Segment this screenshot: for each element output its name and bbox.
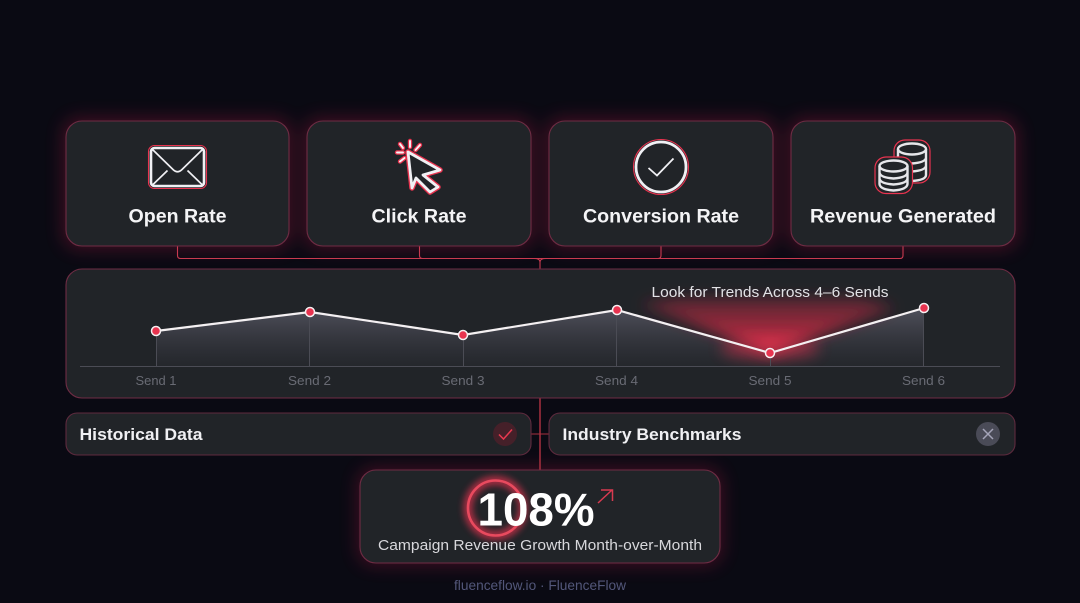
chart: send labels	[136, 373, 945, 388]
result caption: Campaign Revenue Growth Month-over-Month	[378, 537, 702, 554]
icon: envelope	[148, 146, 206, 188]
chart: send labels: Send 6	[902, 373, 945, 388]
footer: fluenceflow.io · FluenceFlow	[454, 578, 626, 593]
chart: send labels: Send 2	[288, 373, 331, 388]
stat: 108%: 108%	[478, 484, 594, 536]
panel: conversion rate	[549, 121, 773, 246]
panel: revenue growth result	[360, 470, 720, 563]
label: industry benchmarks: Industry Benchmarks	[562, 425, 742, 444]
label: conversion rate: Conversion Rate	[583, 206, 739, 228]
chart: drop lines	[80, 308, 1000, 366]
icon: grey cross badge	[976, 422, 1000, 446]
background glows behind panels	[63, 118, 1018, 565]
icon: glowing ring	[468, 480, 523, 536]
panel: historical data	[66, 413, 531, 455]
infographic canvas	[54, 109, 1027, 590]
panel: open rate	[66, 121, 289, 246]
connector lines	[178, 246, 903, 470]
icon: up-right arrow	[598, 490, 612, 503]
panel: click rate	[307, 121, 531, 246]
label: historical data: Historical Data	[80, 425, 203, 444]
panel: revenue generated	[791, 121, 1015, 246]
icon: coin stacks	[875, 140, 930, 194]
chart: send labels: Send 1	[136, 373, 176, 388]
chart: send labels: Send 5	[748, 373, 792, 388]
chart: send labels: Send 3	[442, 373, 484, 388]
icon: check circle	[634, 140, 688, 194]
chart: area under line	[156, 308, 924, 366]
label: revenue generated: Revenue Generated	[810, 206, 996, 228]
chart: data points	[152, 304, 928, 358]
chart: send labels: Send 4	[595, 373, 638, 388]
label: open rate: Open Rate	[128, 206, 227, 228]
label: click rate: Click Rate	[372, 206, 467, 228]
chart: red glow on sends 4 to 6	[640, 298, 895, 360]
chart: trend line	[156, 308, 924, 353]
icon: cursor click	[397, 141, 440, 192]
icon: red check badge	[493, 422, 517, 446]
panel: industry benchmarks	[549, 413, 1015, 455]
chart annotation: Look for Trends Across 4–6 Sends	[652, 285, 888, 301]
panel: trend chart	[66, 269, 1015, 398]
